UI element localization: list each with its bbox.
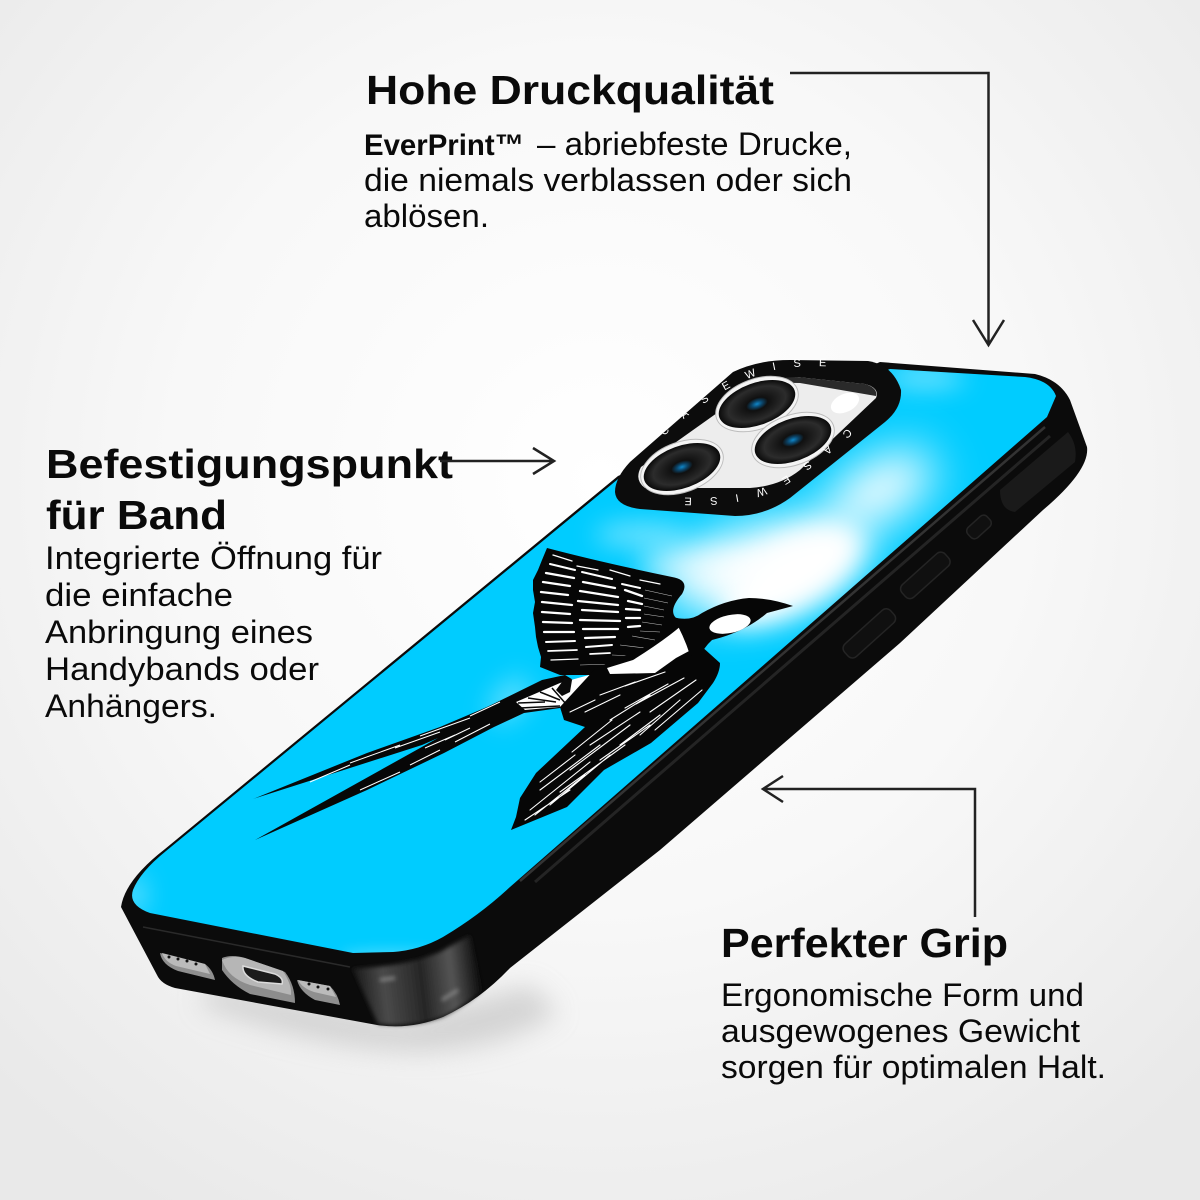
description: ausgewogenes Gewicht (721, 1013, 1080, 1049)
side button: mute (965, 513, 993, 541)
glossy corner (352, 935, 482, 1025)
upper wing fine hatching (580, 590, 672, 665)
lens left (633, 429, 731, 505)
callout: Befestigungspunkt (45, 441, 453, 724)
heading: für Band (46, 492, 227, 538)
left speaker grille (160, 953, 215, 980)
heading: Hohe Druckqualität (366, 67, 774, 113)
head and neck (673, 598, 793, 658)
arrow: print quality (790, 73, 1004, 345)
case body (121, 362, 1087, 1026)
lower wing (511, 645, 720, 830)
description: sorgen für optimalen Halt. (721, 1049, 1106, 1085)
callout: Perfekter Grip (721, 920, 1106, 1085)
lens right (744, 402, 842, 478)
clouds (121, 370, 965, 961)
side button: lower volume (841, 606, 898, 660)
side rim lines (520, 427, 1045, 881)
description: – abriebfeste Drucke, (537, 126, 852, 162)
heading: Perfekter Grip (721, 920, 1008, 966)
swallow illustration (253, 548, 793, 840)
description (721, 977, 1106, 1085)
rump markings (556, 678, 598, 696)
description (45, 540, 382, 724)
camera window (638, 377, 877, 488)
camera bumper: CASEWISE (685, 430, 852, 506)
grip control pad (1000, 432, 1076, 512)
corner highlights (380, 978, 458, 1000)
bottom rim highlight (143, 927, 350, 967)
upper wing feathers (541, 555, 660, 660)
screen print base (132, 369, 1056, 953)
right speaker grille (297, 980, 340, 1005)
description: Handybands oder (45, 651, 319, 687)
upper wing (533, 548, 690, 675)
cheek patch (708, 611, 752, 637)
tail highlights (310, 702, 500, 790)
arrow: grip (763, 776, 975, 917)
arrow: strap attachment (440, 448, 554, 474)
phone drop shadow (200, 985, 558, 1052)
camera bumper (615, 360, 902, 516)
description: Anbringung eines (45, 614, 313, 650)
description: EverPrint™ (364, 129, 524, 162)
description: die einfache (45, 577, 233, 613)
side button: upper volume (898, 550, 953, 601)
description: die niemals verblassen oder sich (364, 162, 852, 198)
white belly (607, 625, 697, 674)
heading: Befestigungspunkt (46, 441, 453, 487)
description: Ergonomische Form und (721, 977, 1084, 1013)
description: ablösen. (364, 198, 489, 234)
lower wing feathers (525, 672, 702, 820)
brand ring text: CASEWISE (662, 360, 826, 434)
callout: Hohe Druckqualität (364, 67, 852, 234)
heading (46, 441, 453, 538)
flash (828, 389, 862, 417)
description: Integrierte Öffnung für (45, 540, 382, 576)
lens top (708, 366, 806, 442)
tail streamers (253, 675, 590, 840)
rump (516, 672, 606, 710)
phone case (121, 360, 1088, 1028)
charging port (222, 956, 295, 1003)
description: Anhängers. (45, 688, 217, 724)
description (364, 126, 852, 234)
